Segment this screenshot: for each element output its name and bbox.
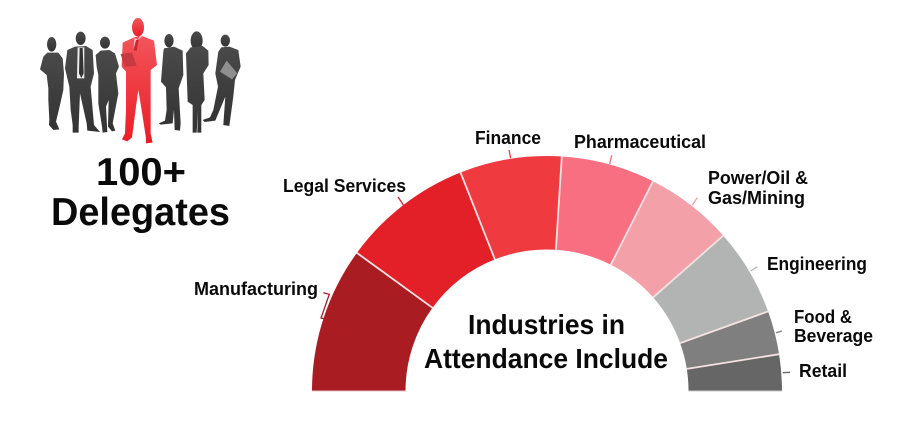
label: Manufacturing: Manufacturing xyxy=(194,278,318,299)
leader: Food & Beverage xyxy=(776,331,782,333)
leader: Manufacturing bracket xyxy=(321,293,329,319)
label: Food & Beverage: Food & xyxy=(794,306,852,327)
leader: Retail xyxy=(783,371,790,374)
leader: Finance xyxy=(509,150,511,158)
title line 2: Attendance Include xyxy=(424,343,668,374)
label: Delegates: Delegates xyxy=(51,191,230,234)
leader: Legal Services xyxy=(398,197,404,206)
segment: Manufacturing xyxy=(312,253,432,391)
label: Legal Services: Legal Services xyxy=(283,175,406,196)
icon: man with tie xyxy=(65,32,100,133)
icon: woman left xyxy=(40,37,64,130)
icon: man right of center xyxy=(159,34,183,131)
segment: Retail xyxy=(687,354,782,391)
icon: group of delegates silhouettes xyxy=(40,18,241,143)
chart: industries semi-circle xyxy=(312,156,782,391)
label: Pharmaceutical: Pharmaceutical xyxy=(574,131,706,152)
number: 100+: 100+ xyxy=(96,151,186,194)
label: Food & Beverage xyxy=(794,306,873,346)
segment: Power/Oil & Gas/Mining xyxy=(611,181,723,297)
segment: Engineering xyxy=(653,236,768,343)
leader: Engineering xyxy=(751,267,757,271)
title line 1: Industries in xyxy=(468,309,625,340)
label: Food & Beverage: Beverage xyxy=(794,325,873,346)
chart center title xyxy=(424,309,668,374)
icon: man with folder xyxy=(203,35,241,126)
label: Power/Oil & Gas/Mining xyxy=(708,167,808,208)
heading: delegates count xyxy=(51,151,230,234)
icon: woman with long hair xyxy=(186,31,209,133)
leader: Power/Oil & Gas/Mining xyxy=(692,198,697,205)
segment: Pharmaceutical xyxy=(556,156,653,265)
label: Power/Oil & Gas/Mining: Power/Oil & xyxy=(708,167,808,188)
label: Finance: Finance xyxy=(475,127,541,148)
label: Retail: Retail xyxy=(799,360,847,381)
label: Power/Oil & Gas/Mining: Gas/Mining xyxy=(708,187,805,208)
segment: Food & Beverage xyxy=(680,311,779,369)
segment: Legal Services xyxy=(357,172,495,308)
label: Engineering: Engineering xyxy=(767,253,867,274)
leader: Pharmaceutical xyxy=(610,155,612,164)
icon: woman arms crossed xyxy=(96,37,119,133)
segment: Finance xyxy=(460,156,562,259)
icon: man in red xyxy=(121,18,157,143)
